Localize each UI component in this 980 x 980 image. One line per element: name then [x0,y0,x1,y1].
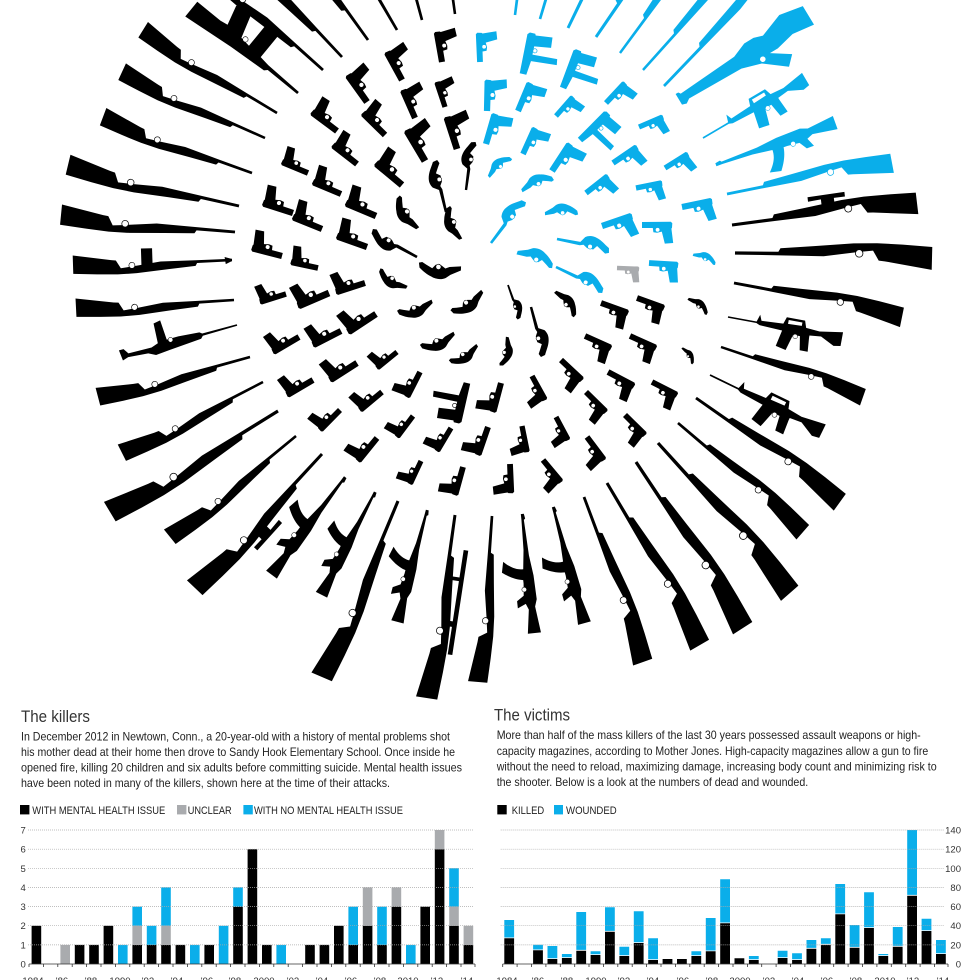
bar chart: killed and wounded per year [496,826,961,980]
text block: victims intro: without the need to reload, maximizing damage, increasing body count and minimizing risk to [496,760,937,774]
x axis labels: killers [22,976,473,980]
text block: victims intro: the shooter. Below is a look at the numbers of dead and wounded. [497,775,808,789]
text block: victims intro [496,728,937,789]
y axis labels: killers: 1 [20,940,26,951]
stacked bars: mental health status [32,830,473,964]
y axis labels: victims [945,826,961,970]
x axis labels: victims [496,976,949,980]
text block: killers intro: his mother dead at their home then drove to Sandy Hook Elementary School. Once inside he [21,745,455,759]
y axis labels: victims: 40 [950,921,961,932]
y axis labels: victims: 20 [950,940,961,951]
y axis labels: killers: 5 [20,864,26,875]
bar chart: killers per year [20,826,475,980]
panel: the killers [20,707,475,980]
text block: victims intro: More than half of the mass killers of the last 30 years possessed assault weapons or high- [497,728,921,742]
black long guns [60,0,932,701]
y axis labels: victims: 120 [945,845,961,856]
legend: killed and wounded: KILLED [512,805,544,817]
gun spiral [60,0,932,701]
y axis labels: victims: 100 [945,864,961,875]
y axis labels: victims: 60 [950,902,961,913]
y axis labels: killers: 0 [20,960,26,970]
legend: mental health [20,805,403,817]
panel: the victims [494,706,961,980]
text block: killers intro: In December 2012 in Newtown, Conn., a 20-year-old with a history of mental problems shot [21,730,451,744]
blue long guns [504,0,894,204]
legend: killed and wounded: WOUNDED [566,805,617,817]
text block: victims intro: capacity magazines, according to Mother Jones. High-capacity magazines allow a gun to fire [497,744,928,758]
heading: the victims: The victims [494,706,570,725]
y axis labels: killers: 3 [20,902,26,913]
y axis labels: killers: 2 [20,921,26,932]
legend: killed and wounded [497,805,617,817]
text block: killers intro [21,730,462,790]
legend: mental health: WITH NO MENTAL HEALTH ISSUE [254,805,403,817]
grey handgun [616,266,640,283]
y axis labels: victims: 0 [956,960,961,970]
y axis labels: killers: 7 [20,826,26,836]
y axis labels: killers: 6 [20,845,26,856]
text block: killers intro: have been noted in many of the killers, shown here at the time of their attacks. [21,776,390,790]
y axis labels: victims: 80 [950,883,961,894]
y axis labels: victims: 140 [945,826,961,836]
black handguns [250,28,712,497]
stacked bars: killed and wounded [504,830,946,964]
heading: the killers: The killers [21,707,90,726]
blue handguns [476,31,718,294]
text block: killers intro: opened fire, killing 20 children and six adults before committing suicide. Mental health issues [21,760,462,774]
y axis labels: killers: 4 [20,883,26,894]
legend: mental health: UNCLEAR [188,805,232,817]
legend: mental health: WITH MENTAL HEALTH ISSUE [32,805,165,817]
y axis labels: killers [20,826,26,970]
